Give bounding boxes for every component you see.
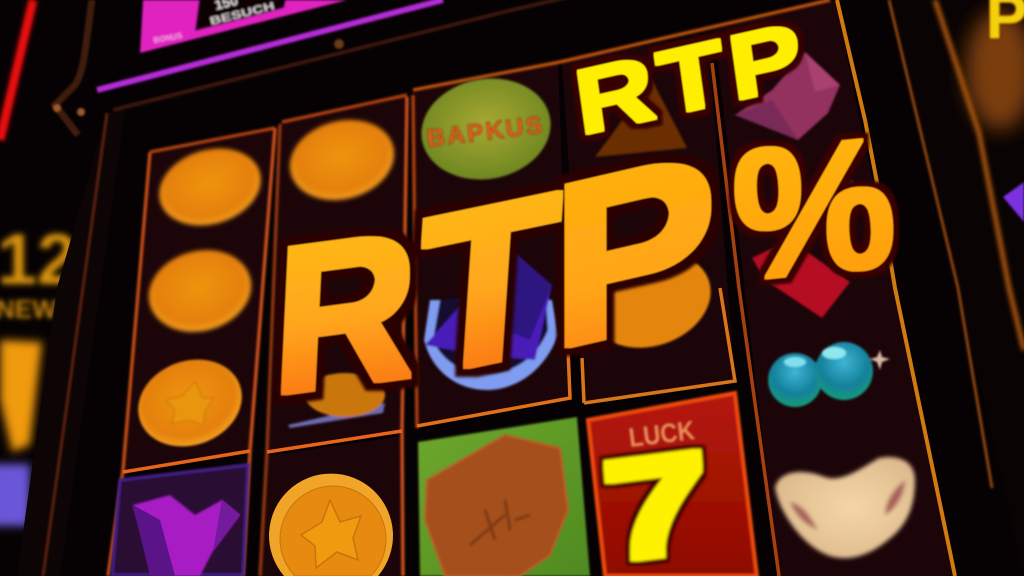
marquee text: BESUCH <box>209 0 276 28</box>
symbol: green tile with shield <box>418 417 590 576</box>
symbol: blue ring with purple gem <box>424 250 558 390</box>
big letter P: P <box>551 103 717 398</box>
symbol: teal balls <box>768 342 890 407</box>
symbol: orange coin behind P <box>577 237 723 363</box>
symbol: gold coins column one <box>139 136 271 343</box>
symbol: large gold star coin <box>269 474 393 576</box>
big letter T: T <box>410 144 566 425</box>
blurred yellow glyph <box>0 340 42 452</box>
symbol: red lucky seven tile <box>588 393 757 576</box>
symbol: green BAPKUS token <box>413 68 559 190</box>
top marquee panel <box>97 0 443 90</box>
percent sign: % <box>728 96 900 321</box>
machine cabinet frame <box>17 0 590 576</box>
marquee small label: BONUS <box>153 31 183 45</box>
symbol: gold coin column two <box>281 109 403 211</box>
symbol: purple gem tile <box>112 465 248 576</box>
purple neon line <box>97 0 443 90</box>
symbol: coin behind R <box>288 373 385 428</box>
symbol: brown triangle <box>595 80 687 157</box>
BAPKUS label: BAPKUS <box>425 111 544 153</box>
blurred blue glow <box>0 464 30 526</box>
symbol: teal chip <box>845 180 859 196</box>
sparkle <box>870 350 890 370</box>
left background machine <box>0 0 77 526</box>
shield engraving <box>470 500 530 545</box>
small RTP heading: RTP <box>569 2 813 155</box>
symbol: pink gem <box>735 52 840 140</box>
big RTP heading <box>269 103 717 439</box>
neon red strip <box>0 0 33 140</box>
symbol: gold coin with star <box>126 345 254 461</box>
symbol: cream nose shape <box>775 457 915 558</box>
big letter R: R <box>269 188 422 439</box>
symbol: red gem <box>752 240 850 318</box>
LUCK label: LUCK <box>627 415 697 453</box>
right side machine <box>889 0 1024 576</box>
blurred purple gem <box>1003 182 1024 222</box>
marquee inner dark box <box>195 0 286 31</box>
